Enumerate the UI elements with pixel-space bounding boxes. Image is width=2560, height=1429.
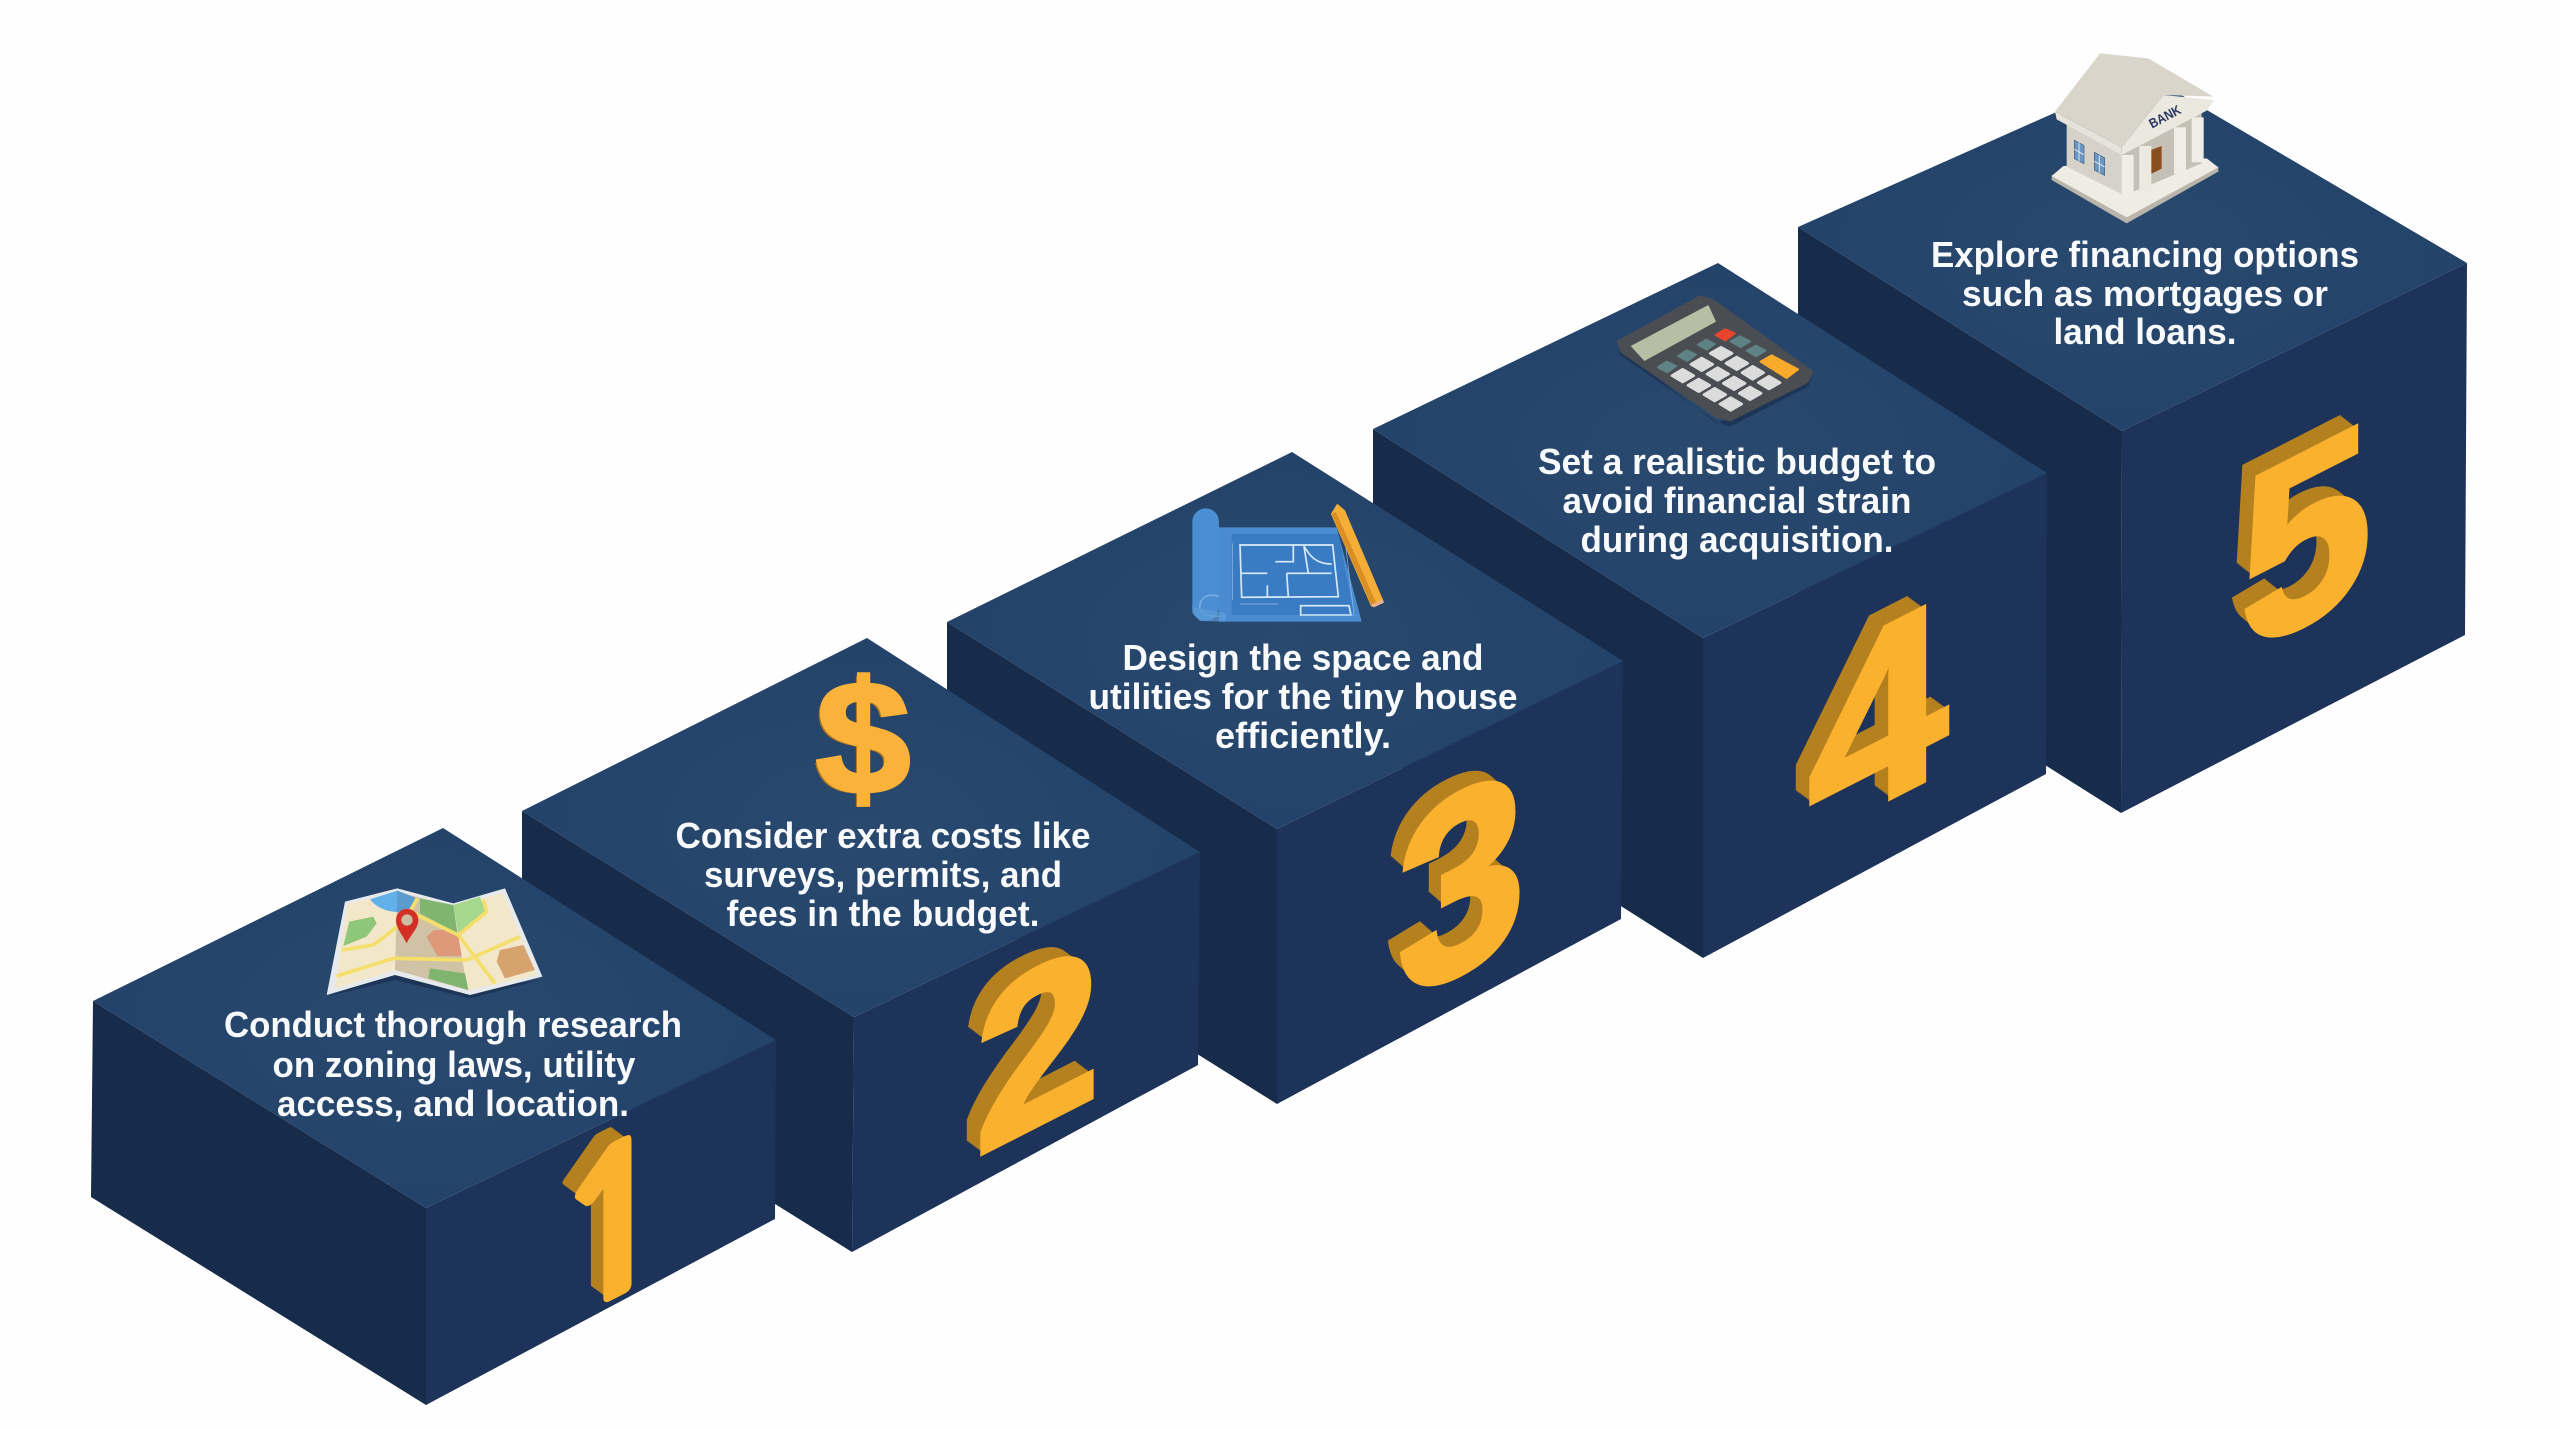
numeral 4: 4 — [1808, 542, 1948, 894]
step 5 text — [1931, 234, 2359, 352]
numeral 5: 5 — [2240, 366, 2372, 709]
icon: bank — [2052, 53, 2218, 223]
step 5 top face — [1798, 73, 2467, 431]
step 1 text: Conduct thorough research — [224, 1004, 682, 1045]
step 5 right face — [2121, 263, 2467, 813]
step 4 text: during acquisition. — [1580, 519, 1894, 560]
step 2 text: Consider extra costs like — [676, 815, 1090, 856]
step 4 text — [1538, 441, 1936, 560]
step 4 right face — [1703, 473, 2047, 958]
step 3 text: Design the space and — [1122, 637, 1484, 678]
step 5 text: Explore financing options — [1931, 234, 2359, 275]
step 2 text: fees in the budget. — [726, 893, 1040, 934]
step 5 block — [1798, 53, 2467, 813]
step 5 text: land loans. — [2054, 311, 2236, 352]
step 1 text — [224, 1004, 682, 1124]
step 4 left face — [1373, 429, 1703, 958]
step 5 text: such as mortgages or — [1962, 273, 2328, 314]
step 1 top face — [93, 828, 776, 1208]
step 3 block — [947, 452, 1623, 1104]
icon: blueprint and pencil — [1192, 505, 1384, 622]
step 3 top face — [947, 452, 1623, 829]
step 2 top face — [522, 638, 1200, 1017]
step 3 left face — [947, 622, 1277, 1104]
step 4 top face — [1373, 263, 2047, 638]
numeral 1: 1 — [553, 1098, 673, 1356]
step 2 right face — [852, 852, 1200, 1252]
numeral 3: 3 — [1397, 706, 1526, 1059]
step 4 block — [1373, 263, 2047, 958]
step 4 text: avoid financial strain — [1562, 480, 1912, 521]
step 3 text — [1088, 637, 1518, 756]
numeral 2: 2 — [975, 889, 1100, 1205]
step 3 text: utilities for the tiny house — [1088, 676, 1518, 717]
step 4 text: Set a realistic budget to — [1538, 441, 1936, 482]
step 3 right face — [1277, 661, 1623, 1104]
icon: bank: BANK — [2146, 102, 2184, 131]
step 2 text: surveys, permits, and — [704, 854, 1062, 895]
step 5 left face — [1798, 227, 2122, 813]
step 1 text: access, and location. — [277, 1083, 629, 1124]
step 1 text: on zoning laws, utility — [272, 1044, 636, 1085]
step 2 left face — [522, 811, 854, 1252]
step 2 block — [522, 638, 1200, 1252]
step 2 text — [676, 815, 1090, 934]
step 1 right face — [426, 1040, 776, 1405]
step 1 left face — [91, 1001, 426, 1405]
icon: calculator — [1618, 297, 1812, 427]
step 3 text: efficiently. — [1215, 715, 1391, 756]
icon: folded map with pin — [327, 888, 542, 998]
step 1 block — [91, 828, 776, 1405]
icon: dollar sign: $ — [816, 648, 910, 827]
